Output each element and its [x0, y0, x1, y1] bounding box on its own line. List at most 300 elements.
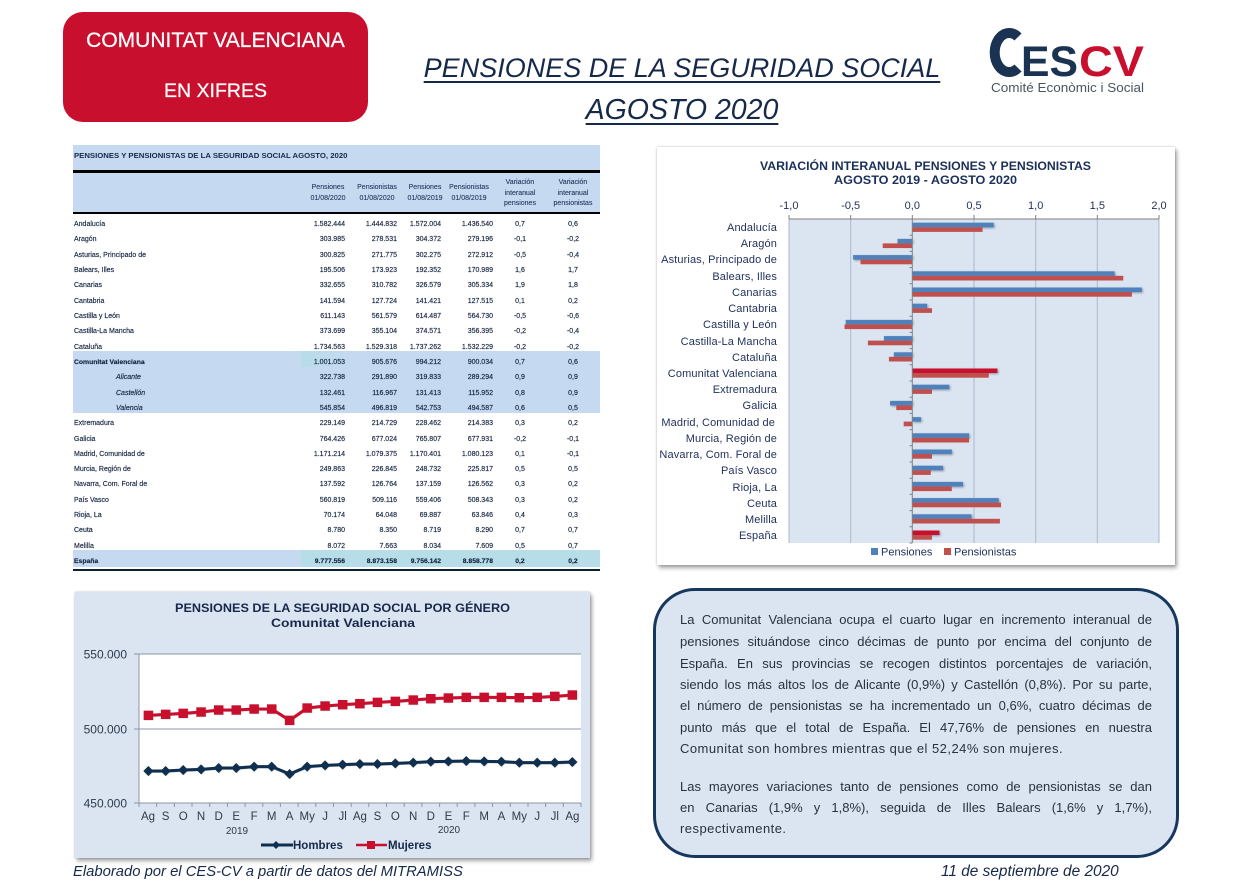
- row: Rioja: 63.846: [472, 512, 493, 519]
- footer: date: 11 de septiembre de 2020: [941, 863, 1119, 880]
- category labels: Melilla: [745, 514, 778, 526]
- row: Navarra: 137.592: [320, 481, 345, 488]
- row: Castellón: 132.461: [320, 390, 345, 396]
- row: Comunitat Valenciana: 0,7: [515, 359, 525, 366]
- row: Aragón: 279.196: [468, 236, 493, 243]
- row: Navarra: [74, 480, 578, 488]
- row: Murcia: 225.817: [468, 466, 493, 473]
- badge: Comunitat Valenciana en xifres: [63, 12, 368, 122]
- row: Cantabria: [74, 297, 578, 305]
- row: Navarra: 126.562: [468, 481, 493, 488]
- table column headers: interanual: [558, 190, 588, 196]
- category labels: Ceuta: [747, 498, 778, 510]
- row: Cantabria: 141.594: [320, 298, 345, 305]
- row: Navarra: 126.764: [372, 481, 397, 488]
- row: Rioja: 64.048: [376, 512, 397, 519]
- row: Castilla-La Mancha: 374.571: [416, 328, 441, 335]
- row: Alicante: 322.738: [320, 374, 345, 381]
- row: Asturias: 302.275: [416, 252, 441, 259]
- table column headers: Variación: [559, 179, 587, 186]
- line chart: pensiones por género: [75, 592, 590, 858]
- month labels: F: [463, 811, 470, 823]
- row: Comunitat Valenciana: [74, 358, 578, 366]
- row: Andalucía: Andalucía: [74, 221, 105, 228]
- category labels: Castilla-La Mancha: [681, 336, 778, 348]
- row: Extremadura: [74, 419, 578, 427]
- row: Cataluña: 1.529.318: [366, 344, 397, 351]
- row: Galicia: [74, 435, 579, 442]
- row: Castilla-La Mancha: -0,2: [514, 328, 526, 335]
- row: Alicante: Alicante: [116, 374, 141, 381]
- row: Asturias: -0,4: [567, 252, 579, 259]
- month labels: Ag: [353, 811, 367, 823]
- row: Ceuta: 0,7: [515, 527, 525, 534]
- row: Rioja: 0,4: [515, 512, 525, 519]
- text panel: commentary: siendo los más altos los de Alicante (0,9%) y Castellón (0,8%). Por su parte,: [680, 677, 1152, 692]
- row: Balears: 1,6: [515, 267, 525, 274]
- row: Cataluña: -0,2: [567, 344, 579, 351]
- row: Valencia: 545.854: [320, 405, 345, 412]
- chart title: [760, 158, 1091, 187]
- row: Melilla: 0,7: [568, 543, 578, 550]
- row: Balears: 195.506: [320, 267, 345, 274]
- row: Alicante: 291.890: [372, 374, 397, 381]
- text panel: commentary: España. En sus provincias se recogen distintos porcentajes de variación,: [680, 656, 1152, 671]
- chart title: [175, 600, 510, 630]
- table column headers: 01/08/2020: [310, 194, 346, 202]
- row: Comunitat Valenciana: 0,6: [568, 359, 578, 366]
- category labels: Asturias, Principado de: [661, 254, 777, 266]
- row: Galicia: Galicia: [74, 436, 95, 442]
- row: Rioja: 0,3: [568, 512, 578, 519]
- row: Asturias: -0,5: [514, 252, 526, 259]
- row: Balears: 170.989: [468, 267, 493, 274]
- row: Castilla-La Mancha: 373.699: [320, 328, 345, 335]
- bar chart: variación interanual: [657, 147, 1175, 565]
- row: Extremadura: 214.383: [468, 420, 493, 427]
- row: Asturias: 272.912: [468, 252, 493, 259]
- row: Canarias: 1,9: [515, 282, 525, 289]
- title: AGOSTO 2020: [586, 94, 778, 126]
- month labels: N: [197, 811, 205, 823]
- row: Alicante: 319.833: [416, 374, 441, 381]
- chart title: VARIACIÓN INTERANUAL PENSIONES Y PENSIONISTAS: [760, 158, 1091, 173]
- row: Castilla y León: -0,6: [567, 313, 579, 320]
- category labels: [659, 222, 778, 542]
- category labels: Galicia: [743, 400, 778, 412]
- month labels: J: [534, 811, 540, 823]
- table column headers: [310, 178, 592, 207]
- title: PENSIONES DE LA SEGURIDAD SOCIAL: [424, 53, 940, 83]
- row: Aragón: 303.985: [320, 236, 345, 243]
- text panel: commentary: pensiones situándose cinco décimas de punto por encima del conjunto de: [680, 634, 1152, 649]
- row: Asturias: Asturias, Principado de: [74, 252, 146, 259]
- row: Comunitat Valenciana: 900.034: [468, 359, 493, 366]
- row: País Vasco: 0,3: [515, 497, 525, 504]
- row: España: 8.873.158: [367, 558, 397, 565]
- row: País Vasco: 0,2: [568, 497, 578, 504]
- row: Asturias: 271.775: [372, 252, 397, 259]
- month labels: E: [232, 811, 240, 823]
- row: Valencia: Valencia: [116, 405, 143, 412]
- row: Galicia: 764.426: [320, 436, 345, 442]
- month labels: [141, 811, 579, 823]
- row: Rioja: Rioja, La: [74, 512, 102, 519]
- row: Melilla: [74, 542, 578, 550]
- row: Aragón: -0,1: [514, 236, 526, 243]
- row: Comunitat Valenciana: Comunitat Valenciana: [74, 359, 145, 366]
- row: Cantabria: 0,2: [568, 298, 578, 305]
- row: Melilla: 7.609: [475, 543, 493, 550]
- row: Andalucía: 1.582.444: [314, 221, 345, 228]
- row: Extremadura: 0,2: [568, 420, 578, 427]
- row: Castellón: 0,9: [568, 390, 578, 396]
- month labels: M: [479, 811, 489, 823]
- y axis labels: [84, 648, 127, 810]
- row: Melilla: 0,5: [515, 543, 525, 550]
- row: País Vasco: 559.406: [416, 497, 441, 504]
- row: Madrid: Madrid, Comunidad de: [74, 451, 145, 458]
- row: Castellón: Castellón: [116, 390, 145, 396]
- row: Canarias: 1,8: [568, 282, 578, 289]
- row: Castilla-La Mancha: Castilla-La Mancha: [74, 328, 134, 335]
- row: Madrid: 1.080.123: [462, 451, 493, 458]
- row: Ceuta: Ceuta: [74, 527, 93, 534]
- table column headers: Pensionistas: [449, 184, 489, 191]
- table column headers: Variación: [506, 179, 534, 186]
- category labels: Madrid, Comunidad de: [661, 417, 775, 429]
- table column headers: Pensiones: [312, 184, 344, 191]
- row: España: [74, 558, 578, 565]
- row: Ceuta: 8.290: [475, 527, 493, 534]
- x axis labels: -1,0: [780, 200, 798, 212]
- text panel: commentary: La Comunitat Valenciana ocupa el cuarto lugar en incremento interanual de: [680, 612, 1152, 627]
- row: Aragón: 278.531: [372, 236, 397, 243]
- month labels: D: [427, 811, 435, 823]
- table column headers: 01/08/2020: [359, 194, 395, 202]
- table column headers: Pensionistas: [357, 184, 397, 191]
- category labels: Rioja, La: [732, 482, 778, 494]
- category labels: Comunitat Valenciana: [668, 368, 778, 380]
- month labels: S: [374, 811, 382, 823]
- x axis labels: 0,5: [966, 200, 982, 212]
- row: Cataluña: 1.734.563: [314, 344, 345, 351]
- table column headers: 01/08/2019: [407, 194, 443, 202]
- table column headers: pensiones: [504, 200, 536, 207]
- row: Cataluña: [74, 343, 579, 351]
- table column headers: 01/08/2019: [451, 194, 487, 202]
- row: Navarra: 0,3: [515, 481, 525, 488]
- row: Valencia: 0,5: [568, 405, 578, 412]
- chart title: AGOSTO 2019 - AGOSTO 2020: [834, 173, 1017, 187]
- row: Cataluña: Cataluña: [74, 344, 102, 351]
- row: Extremadura: Extremadura: [74, 420, 114, 427]
- row: Murcia: 248.732: [416, 466, 441, 473]
- row: Andalucía: 1.572.004: [410, 221, 441, 228]
- row: Castilla-La Mancha: 355.104: [372, 328, 397, 335]
- category labels: Extremadura: [713, 384, 778, 396]
- month labels: N: [409, 811, 417, 823]
- row: Castilla y León: 611.143: [320, 313, 345, 320]
- category labels: País Vasco: [721, 465, 777, 477]
- row: Extremadura: 214.729: [372, 420, 397, 427]
- logo: CES-CV: Comité Econòmic i Social: [991, 80, 1144, 95]
- month labels: A: [498, 811, 506, 823]
- row: Valencia: 496.819: [372, 405, 397, 412]
- month labels: My: [512, 811, 527, 823]
- row: Extremadura: 228.462: [416, 420, 441, 427]
- row: Balears: 173.923: [372, 267, 397, 274]
- x axis labels: 1,5: [1090, 200, 1105, 212]
- row: Alicante: 289.294: [468, 374, 493, 381]
- x axis labels: -0,5: [841, 200, 860, 212]
- y axis labels: 450.000: [84, 796, 127, 810]
- row: Balears: 192.352: [416, 267, 441, 274]
- row: Melilla: Melilla: [74, 543, 94, 550]
- row: Madrid: 1.079.375: [366, 451, 397, 458]
- row: Galicia: -0,1: [567, 436, 579, 442]
- row: Murcia: 0,5: [568, 466, 578, 473]
- row: Cataluña: 1.737.262: [410, 344, 441, 351]
- x axis labels: 1,0: [1028, 200, 1043, 212]
- row: Castilla y León: -0,5: [514, 313, 526, 320]
- row: Ceuta: [74, 526, 578, 534]
- row: Balears: 1,7: [568, 267, 578, 274]
- row: Murcia: Murcia, Región de: [74, 466, 131, 473]
- row: Ceuta: 8.350: [379, 527, 397, 534]
- badge: Comunitat Valenciana en xifres: EN XIFRES: [164, 80, 267, 102]
- row: Murcia: 0,5: [515, 466, 525, 473]
- row: Cantabria: 141.421: [416, 298, 441, 305]
- row: España: España: [74, 558, 98, 565]
- row: Andalucía: 1.444.832: [366, 221, 397, 228]
- category labels: Balears, Illes: [712, 271, 777, 283]
- x axis labels: 0,0: [905, 200, 920, 212]
- row: Murcia: 249.863: [320, 466, 345, 473]
- row: Rioja: 69.887: [420, 512, 441, 519]
- legend: Pensiones: [881, 546, 933, 558]
- category labels: Castilla y León: [703, 319, 777, 331]
- month labels: Ag: [565, 811, 579, 823]
- row: España: 0,2: [515, 558, 525, 565]
- row: Comunitat Valenciana: 905.676: [372, 359, 397, 366]
- row: Castilla-La Mancha: -0,4: [567, 328, 579, 335]
- row: Canarias: 326.579: [416, 282, 441, 289]
- legend: [871, 546, 1017, 558]
- row: Aragón: Aragón: [74, 236, 97, 243]
- row: País Vasco: 560.819: [320, 497, 345, 504]
- category labels: Aragón: [741, 238, 777, 250]
- row: Ceuta: 8.780: [327, 527, 345, 534]
- row: Aragón: -0,2: [567, 236, 579, 243]
- year labels: [226, 825, 461, 837]
- text panel: commentary: Las mayores variaciones tanto de pensiones como de pensionistas se dan: [680, 779, 1152, 794]
- chart title: PENSIONES DE LA SEGURIDAD SOCIAL POR GÉNERO: [175, 600, 510, 615]
- title: [424, 53, 940, 126]
- legend: Mujeres: [388, 840, 431, 852]
- row: País Vasco: 508.343: [468, 497, 493, 504]
- row: Extremadura: 229.149: [320, 420, 345, 427]
- row: Rioja: [74, 511, 578, 519]
- row: Cantabria: 127.515: [468, 298, 493, 305]
- text panel: commentary: Comunitat son hombres mientras que el 52,24% son mujeres.: [680, 741, 1063, 756]
- row: Canarias: 332.655: [320, 282, 345, 289]
- category labels: Cataluña: [732, 352, 778, 364]
- row: Aragón: [74, 235, 579, 243]
- row: Castilla y León: 561.579: [372, 313, 397, 320]
- y axis labels: 500.000: [84, 722, 127, 736]
- text panel: commentary: en Canarias (1,9% y 1,8%), seguida de Illes Balears (1,6% y 1,7%),: [680, 800, 1152, 815]
- row: Ceuta: 8.719: [423, 527, 441, 534]
- row: Alicante: 0,9: [568, 374, 578, 381]
- legend: [261, 840, 431, 852]
- row: Cantabria: 127.724: [372, 298, 397, 305]
- row: Comunitat Valenciana: 994.212: [416, 359, 441, 366]
- text panel: commentary: respectivamente.: [680, 821, 787, 836]
- series: hombres: [148, 761, 572, 774]
- month labels: S: [162, 811, 170, 823]
- month labels: Ag: [141, 811, 155, 823]
- logo: CES-CV: [990, 28, 1144, 95]
- row: Balears: [74, 266, 578, 274]
- table column headers: Pensiones: [409, 184, 441, 191]
- row: Galicia: 677.024: [372, 436, 397, 442]
- row: Madrid: 1.170.401: [410, 451, 441, 458]
- row: Melilla: 8.034: [423, 543, 441, 550]
- row: País Vasco: [74, 496, 578, 504]
- month labels: A: [286, 811, 294, 823]
- row: Navarra: 0,2: [568, 481, 578, 488]
- table title: PENSIONES Y PENSIONISTAS DE LA SEGURIDAD SOCIAL AGOSTO, 2020: [74, 151, 347, 160]
- row: Canarias: [74, 281, 578, 289]
- year labels: 2019: [226, 826, 249, 837]
- table column headers: pensionistas: [554, 200, 592, 207]
- logo: CES-CV: CV: [1079, 38, 1144, 86]
- month labels: My: [300, 811, 315, 823]
- row: Castellón: 131.413: [416, 390, 441, 396]
- category labels: Navarra, Com. Foral de: [659, 449, 777, 461]
- row: Castilla-La Mancha: [74, 327, 579, 335]
- month labels: Jl: [338, 811, 347, 823]
- month labels: E: [445, 811, 453, 823]
- row: Andalucía: 1.436.540: [462, 221, 493, 228]
- text panel: commentary: el número de pensionistas se ha incrementado un 0,6%, cuatro décimas de: [680, 698, 1152, 713]
- row: Castilla y León: 564.730: [468, 313, 493, 320]
- row: Melilla: 7.663: [379, 543, 397, 550]
- category labels: Canarias: [732, 287, 777, 299]
- row: Rioja: 70.174: [324, 512, 345, 519]
- series: mujeres: [148, 695, 572, 720]
- legend: Pensionistas: [954, 546, 1017, 558]
- row: Valencia: 0,6: [515, 405, 525, 412]
- row: Extremadura: 0,3: [515, 420, 525, 427]
- row: Madrid: -0,1: [567, 451, 579, 458]
- row: Alicante: 0,9: [515, 374, 525, 381]
- row: Castilla-La Mancha: 356.395: [468, 328, 493, 335]
- row: Castellón: 116.967: [372, 390, 397, 396]
- row: Asturias: [74, 251, 579, 259]
- x axis labels: 2,0: [1151, 200, 1167, 212]
- row: Cataluña: 1.532.229: [462, 344, 493, 351]
- row: Canarias: Canarias: [74, 282, 102, 289]
- row: Asturias: 300.825: [320, 252, 345, 259]
- row: Navarra: Navarra, Com. Foral de: [74, 481, 147, 488]
- month labels: F: [251, 811, 258, 823]
- row: España: 9.756.142: [411, 558, 441, 565]
- row: Murcia: 226.845: [372, 466, 397, 473]
- text panel: commentary: [653, 588, 1179, 858]
- row: Cantabria: 0,1: [515, 298, 525, 305]
- category labels: Cantabria: [728, 303, 778, 315]
- row: Castilla y León: Castilla y León: [74, 313, 120, 320]
- row: Navarra: 137.159: [416, 481, 441, 488]
- row: País Vasco: 509.116: [372, 497, 397, 504]
- row: Cantabria: Cantabria: [74, 298, 104, 305]
- month labels: O: [179, 811, 188, 823]
- row: Alicante: [116, 373, 578, 381]
- month labels: Jl: [551, 811, 559, 823]
- row: Madrid: 1.171.214: [314, 451, 345, 458]
- row: Ceuta: 0,7: [568, 527, 578, 534]
- legend: Hombres: [293, 840, 343, 852]
- y axis labels: 550.000: [84, 648, 127, 662]
- text panel: commentary: punto más que el total de España. El 47,76% de pensiones en nuestra: [680, 720, 1152, 735]
- footer: source: Elaborado por el CES-CV a partir de datos del MITRAMISS: [73, 864, 463, 880]
- bars: pensionistas: [844, 227, 1132, 540]
- row: Andalucía: 0,6: [568, 221, 578, 228]
- row: Comunitat Valenciana: 1.001.053: [314, 359, 345, 366]
- row: Castilla y León: [74, 312, 579, 320]
- month labels: J: [322, 811, 328, 823]
- row: Madrid: [74, 450, 579, 458]
- x axis labels: [780, 200, 1167, 212]
- row: España: 8.858.778: [463, 558, 493, 565]
- row: Cataluña: -0,2: [514, 344, 526, 351]
- row: Murcia: [74, 465, 578, 473]
- table: pensiones y pensionistas: [73, 145, 600, 571]
- row: Melilla: 8.072: [327, 543, 345, 550]
- month labels: M: [267, 811, 276, 823]
- row: Aragón: 304.372: [416, 236, 441, 243]
- row: Canarias: 305.334: [468, 282, 493, 289]
- month labels: O: [391, 811, 400, 823]
- row: País Vasco: País Vasco: [74, 497, 109, 504]
- badge: Comunitat Valenciana en xifres: COMUNITAT VALENCIANA: [86, 29, 345, 52]
- month labels: D: [215, 811, 223, 823]
- logo: CES-CV: ES: [1021, 38, 1078, 86]
- row: Galicia: 765.807: [416, 436, 441, 442]
- row: Canarias: 310.782: [372, 282, 397, 289]
- row: Castilla y León: 614.487: [416, 313, 441, 320]
- row: Castellón: 0,8: [515, 390, 525, 396]
- category labels: España: [739, 530, 778, 542]
- row: España: 0,2: [568, 558, 578, 565]
- row: Valencia: 542.753: [416, 405, 441, 412]
- row: Andalucía: [74, 220, 578, 228]
- bars: pensiones: [846, 223, 1142, 535]
- row: Madrid: 0,1: [515, 451, 525, 458]
- row: Castellón: [116, 389, 578, 396]
- row: Balears: Balears, Illes: [74, 267, 114, 274]
- row: Galicia: 677.931: [468, 436, 493, 442]
- row: Valencia: [116, 404, 578, 412]
- year labels: 2020: [438, 825, 461, 836]
- row: España: 9.777.556: [315, 558, 345, 565]
- row: Castellón: 115.952: [468, 390, 493, 396]
- row: Galicia: -0,2: [514, 436, 526, 442]
- row: Valencia: 494.587: [468, 405, 493, 412]
- table column headers: interanual: [505, 190, 535, 196]
